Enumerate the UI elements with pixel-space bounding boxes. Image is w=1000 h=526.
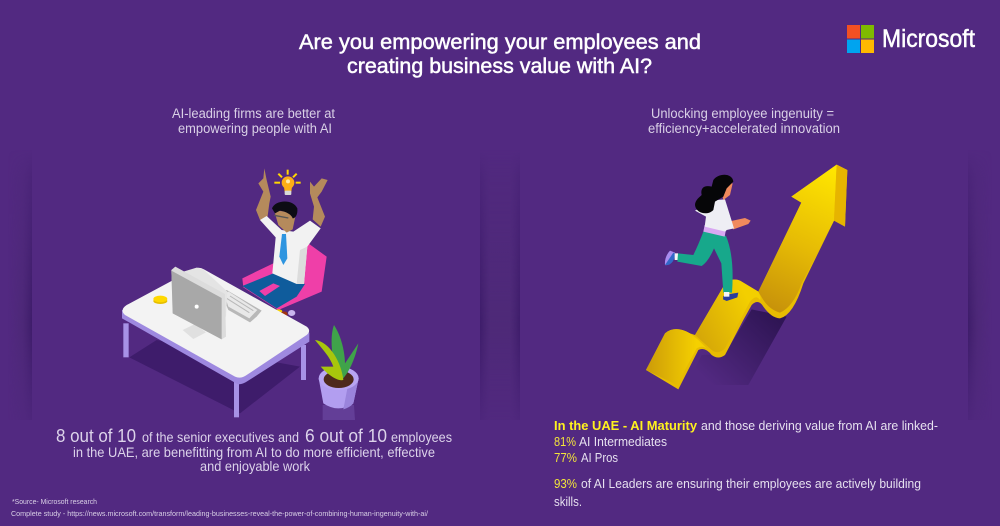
left arm — [256, 168, 271, 220]
shoes — [274, 309, 282, 313]
subheading: right column: Unlocking employee ingenuity = — [651, 106, 834, 121]
text: AI maturity statistics: In the UAE - AI Maturity — [554, 418, 698, 433]
text: AI maturity statistics: and those deriving value from AI are linked- — [701, 418, 938, 433]
upper shaft and head — [758, 165, 837, 313]
desk shadow — [129, 340, 300, 413]
glasses — [274, 215, 288, 218]
desk — [122, 267, 309, 417]
text: AI maturity statistics: 77% — [554, 450, 577, 465]
title: Are you empowering your employees and — [299, 30, 701, 54]
text: executives and employees statistic: of the senior executives and — [142, 429, 299, 445]
source note: *Source- Microsoft research — [12, 497, 97, 506]
waist band — [703, 225, 726, 237]
neck and face — [274, 210, 296, 233]
logo: Microsoft — [847, 25, 975, 53]
subheading: left column: AI-leading firms are better at — [172, 106, 335, 121]
trousers — [677, 230, 733, 293]
text: executives and employees statistic: 8 out of 10 — [56, 425, 136, 446]
icon: light bulb — [274, 170, 301, 195]
logo: Microsoft: Microsoft — [882, 25, 975, 53]
text: AI maturity statistics: 81% — [554, 434, 576, 449]
coin — [153, 298, 167, 304]
source note: Complete study - https://news.microsoft.com/transform/leading-businesses-reveal-the-power-of-combining-human-ingenuity-with-ai/ — [11, 509, 429, 518]
title — [299, 30, 701, 78]
keyboard — [221, 290, 262, 322]
trousers — [242, 273, 305, 308]
text: AI maturity statistics: skills. — [554, 494, 582, 509]
lower wave — [646, 329, 710, 385]
shirt — [260, 216, 321, 284]
subheading: right column: efficiency+accelerated innovation — [648, 121, 840, 136]
source note — [11, 497, 429, 518]
right arm — [310, 178, 328, 227]
woman — [665, 175, 751, 301]
arrow shadow — [687, 309, 787, 385]
text: executives and employees statistic: employees — [391, 429, 452, 445]
monitor stand — [183, 324, 206, 339]
shirt — [695, 199, 734, 232]
plant — [315, 325, 359, 420]
arrow silhouette — [646, 165, 847, 389]
chair — [242, 243, 327, 310]
hair — [272, 201, 297, 218]
arm — [728, 218, 751, 229]
text: AI maturity statistics: 93% — [554, 476, 577, 491]
text: AI maturity statistics: of AI Leaders are ensuring their employees are actively building — [581, 476, 921, 491]
text: executives and employees statistic: 6 out of 10 — [305, 425, 387, 446]
title: creating business value with AI? — [347, 54, 652, 78]
tie — [279, 234, 287, 265]
front foot — [723, 293, 738, 301]
middle wave — [695, 280, 761, 352]
text: AI maturity statistics: AI Intermediates — [579, 434, 667, 449]
illustration: office worker at desk — [122, 168, 359, 420]
arrow — [646, 165, 847, 389]
text: AI maturity statistics: AI Pros — [581, 450, 618, 465]
man — [242, 168, 328, 317]
text: executives and employees statistic: in the UAE, are benefitting from AI to do more efficient, effective — [73, 444, 435, 460]
hair — [695, 175, 733, 213]
text: executives and employees statistic: and enjoyable work — [200, 458, 311, 474]
face — [720, 183, 733, 200]
back foot — [665, 251, 675, 265]
monitor — [183, 268, 227, 318]
subheading: right column — [648, 106, 840, 136]
text: executives and employees statistic — [56, 425, 452, 474]
illustration: woman running up rising arrow — [646, 165, 847, 389]
subheading: left column — [172, 106, 335, 136]
subheading: left column: empowering people with AI — [178, 121, 332, 136]
text: AI maturity statistics — [554, 418, 938, 509]
